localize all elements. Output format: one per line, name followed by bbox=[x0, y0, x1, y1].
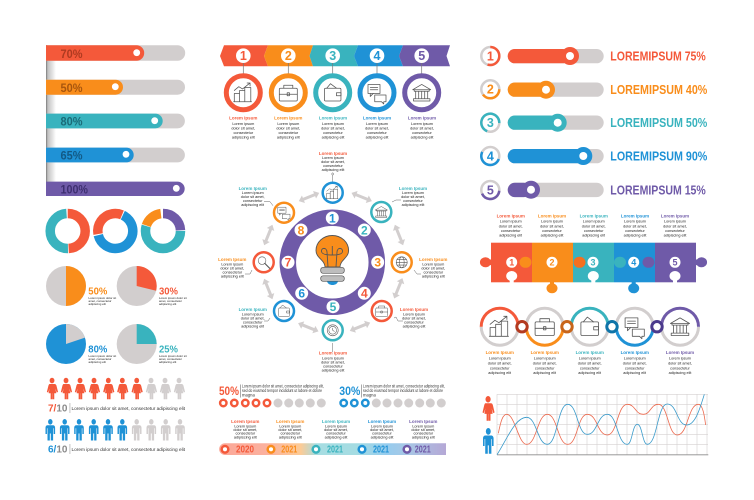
linked circle labels: dolor sit amet, bbox=[578, 362, 602, 366]
linked circle labels: dolor sit amet, bbox=[623, 362, 647, 366]
slider 4 bbox=[479, 144, 707, 168]
puzzle labels: dolor sit amet, bbox=[582, 224, 606, 228]
pie chart 25%: amet, consectetur bbox=[159, 357, 182, 361]
timeline markers and years: 2021 bbox=[373, 444, 389, 456]
node 4: adipiscing elit bbox=[403, 324, 426, 328]
stat: 50% with dots: sed do eiusmod tempor incididunt ut labore et dolore bbox=[242, 388, 323, 393]
linked circle labels: consectetur bbox=[535, 366, 555, 370]
timeline labels: adipiscing elit bbox=[325, 436, 348, 440]
node 4 bbox=[372, 301, 428, 328]
puzzle labels: dolor sit amet, bbox=[623, 224, 647, 228]
step 5: consectetur bbox=[412, 131, 433, 135]
node 7 bbox=[218, 252, 274, 278]
linked circle labels: Lorem Ipsum bbox=[666, 350, 694, 355]
step 4: Lorem ipsum bbox=[366, 122, 388, 126]
pie chart 50%: 50% bbox=[88, 286, 107, 298]
stat: 30% with dots: Lorem ipsum dolor sit amet, consectetur adipiscing elit, bbox=[363, 384, 445, 388]
step 5: adipiscing elit bbox=[411, 136, 434, 140]
node 8: consectetur bbox=[243, 199, 263, 203]
cycle arrows bbox=[260, 189, 407, 335]
node 3: adipiscing elit bbox=[422, 274, 446, 278]
pie chart 25% bbox=[117, 324, 187, 364]
linked circle labels: consectetur bbox=[625, 366, 645, 370]
timeline labels: dolor sit amet, bbox=[278, 428, 302, 432]
puzzle labels: Lorem Ipsum bbox=[497, 214, 525, 218]
node 5: adipiscing elit bbox=[322, 368, 345, 372]
step 5: 5 bbox=[418, 49, 425, 63]
red series bbox=[498, 404, 706, 444]
link 5 bbox=[662, 308, 698, 345]
node 3: dolor sit amet, bbox=[421, 266, 445, 270]
pictogram: 7 of 10 women: 7/10 bbox=[48, 404, 68, 414]
pie chart 80% bbox=[46, 324, 116, 364]
puzzle numbers: 3 bbox=[590, 258, 596, 268]
linked circle labels: adipiscing elit bbox=[488, 371, 512, 375]
step 1: 1 bbox=[240, 49, 247, 63]
donut 3 bbox=[146, 214, 180, 248]
linked circle labels: dolor sit amet, bbox=[488, 362, 512, 366]
timeline markers and years: 2020 bbox=[236, 444, 254, 456]
pie chart 30%: amet, consectetur bbox=[159, 299, 182, 303]
link 2 bbox=[526, 308, 563, 345]
linked circle labels: Lorem ipsum bbox=[579, 356, 601, 360]
slider 1 bbox=[481, 47, 706, 65]
timeline labels bbox=[231, 419, 437, 440]
puzzle labels bbox=[497, 214, 689, 238]
ring numbers: 4 bbox=[361, 287, 368, 301]
step 3: Lorem Ipsum bbox=[319, 116, 347, 120]
timeline labels: Lorem ipsum bbox=[234, 424, 256, 428]
linked circle labels: consectetur bbox=[490, 366, 510, 370]
step 2 bbox=[271, 48, 305, 140]
node 2: Lorem ipsum bbox=[402, 191, 424, 195]
slider 5: 5 bbox=[487, 183, 494, 197]
donut 2 bbox=[95, 211, 136, 251]
puzzle labels: Lorem Ipsum bbox=[580, 214, 608, 218]
node 4: Lorem ipsum bbox=[403, 312, 425, 316]
purple ring bbox=[288, 218, 377, 307]
node 5: dolor sit amet, bbox=[321, 360, 345, 364]
puzzle labels: Lorem ipsum bbox=[664, 220, 686, 224]
linked circle labels: dolor sit amet, bbox=[668, 362, 692, 366]
ring numbers: 3 bbox=[374, 256, 381, 270]
timeline labels: dolor sit amet, bbox=[233, 428, 257, 432]
linked circle labels: Lorem Ipsum bbox=[531, 350, 559, 355]
pictogram: 7 of 10 women bbox=[47, 378, 186, 414]
step 2: Lorem Ipsum bbox=[274, 116, 302, 120]
step 3 bbox=[316, 48, 350, 140]
node 2: Lorem Ipsum bbox=[399, 186, 427, 191]
puzzle labels: adipiscing elit bbox=[624, 234, 647, 238]
puzzle labels: adipiscing elit bbox=[541, 234, 564, 238]
step 5: Lorem ipsum bbox=[411, 122, 433, 126]
timeline labels: adipiscing elit bbox=[234, 436, 258, 440]
link 3 bbox=[571, 308, 608, 345]
node 2: dolor sit amet, bbox=[401, 195, 425, 199]
node 7: dolor sit amet, bbox=[220, 266, 244, 270]
timeline markers and years: 2021 bbox=[327, 444, 343, 456]
ring numbers: 8 bbox=[298, 223, 305, 237]
node 3: Lorem Ipsum bbox=[419, 257, 447, 262]
step 5 bbox=[405, 48, 439, 140]
step 4: dolor sit amet, bbox=[365, 126, 389, 130]
linked circle labels: dolor sit amet, bbox=[533, 362, 557, 366]
slider 4: LOREMIPSUM 90% bbox=[610, 150, 707, 164]
timeline labels: adipiscing elit bbox=[279, 436, 303, 440]
timeline markers and years bbox=[222, 444, 431, 456]
linked circle labels: Lorem ipsum bbox=[534, 356, 556, 360]
node 6 bbox=[239, 301, 294, 328]
stat: 30% with dots bbox=[339, 384, 446, 408]
stat: 30% with dots: magna bbox=[363, 392, 376, 398]
icon: woman bbox=[483, 396, 495, 421]
puzzle numbers: 5 bbox=[672, 258, 678, 268]
puzzle numbers: 1 bbox=[509, 258, 514, 268]
pictogram: 7 of 10 women: Lorem ipsum dolor sit amet, consectetur adipiscing elit bbox=[72, 406, 186, 411]
puzzle labels: Lorem ipsum bbox=[500, 220, 522, 224]
timeline labels: Lorem Ipsum bbox=[231, 419, 259, 424]
step 5: dolor sit amet, bbox=[410, 126, 434, 130]
node 6: consectetur bbox=[243, 320, 263, 324]
node 1: adipiscing elit bbox=[322, 168, 345, 172]
slider 1: 1 bbox=[487, 49, 494, 63]
node 4: Lorem Ipsum bbox=[400, 307, 428, 312]
blue series bbox=[497, 394, 704, 455]
linked circle labels: consectetur bbox=[670, 366, 691, 370]
ring numbers: 2 bbox=[361, 223, 368, 237]
timeline labels: consectetur bbox=[372, 432, 393, 436]
node 1: dolor sit amet, bbox=[321, 160, 345, 164]
node 6: dolor sit amet, bbox=[241, 316, 265, 320]
chart baseline bbox=[497, 454, 708, 455]
bar: 100% bbox=[46, 182, 185, 196]
step 4: consectetur bbox=[367, 131, 388, 135]
bar: 80% bbox=[46, 114, 185, 128]
node 5: Lorem ipsum bbox=[322, 356, 344, 360]
step 3: 3 bbox=[329, 49, 336, 63]
timeline labels: Lorem ipsum bbox=[371, 424, 393, 428]
node 4: dolor sit amet, bbox=[402, 316, 426, 320]
slider 5: LOREMIPSUM 15% bbox=[610, 184, 706, 198]
puzzle labels: Lorem Ipsum bbox=[661, 214, 689, 218]
chart grid bbox=[497, 394, 708, 455]
step 1: adipiscing elit bbox=[232, 136, 256, 140]
timeline labels: adipiscing elit bbox=[412, 436, 436, 440]
node 4: consectetur bbox=[404, 320, 425, 324]
pie chart 30%: adipiscing elit bbox=[159, 302, 177, 306]
timeline labels: consectetur bbox=[235, 432, 256, 436]
bar: 70% bbox=[46, 45, 185, 61]
linked circle labels: consectetur bbox=[580, 366, 600, 370]
node 7: consectetur bbox=[222, 270, 243, 274]
ring numbers bbox=[282, 211, 384, 314]
puzzle labels: consectetur bbox=[584, 229, 604, 233]
bar: 50% bbox=[46, 80, 185, 95]
pie chart 30% bbox=[117, 266, 187, 306]
bar: 50%: 50% bbox=[60, 81, 83, 95]
node 5 bbox=[319, 320, 347, 372]
connector rings bbox=[517, 322, 662, 332]
pie chart 80%: amet, consectetur bbox=[88, 357, 112, 361]
puzzle labels: Lorem Ipsum bbox=[621, 214, 649, 218]
donut 1 bbox=[50, 214, 85, 248]
node 2 bbox=[371, 186, 427, 222]
pie chart 50%: amet, consectetur bbox=[88, 299, 112, 303]
bar: 65% bbox=[46, 148, 185, 162]
ring numbers: 7 bbox=[285, 256, 292, 270]
node 7: Lorem ipsum bbox=[221, 262, 243, 266]
icon: man bbox=[483, 428, 494, 454]
timeline labels: consectetur bbox=[326, 432, 347, 436]
pie chart 50%: adipiscing elit bbox=[88, 302, 106, 306]
puzzle numbers bbox=[506, 257, 680, 268]
puzzle labels: consectetur bbox=[665, 229, 686, 233]
slider 2: LOREMIPSUM 40% bbox=[610, 83, 707, 97]
timeline labels: Lorem ipsum bbox=[279, 424, 301, 428]
node 2: adipiscing elit bbox=[402, 203, 425, 207]
stat: 30% with dots: 30% bbox=[339, 384, 361, 398]
node 1: Lorem ipsum bbox=[322, 156, 344, 160]
pie chart 80%: adipiscing elit bbox=[88, 360, 106, 364]
ring numbers: 6 bbox=[298, 287, 305, 301]
puzzle labels: adipiscing elit bbox=[582, 234, 606, 238]
pie chart 50%: Lorem ipsum dolor sit bbox=[88, 296, 116, 300]
step 4: Lorem Ipsum bbox=[363, 116, 391, 120]
bar: 70%: 70% bbox=[60, 47, 83, 61]
stat: 30% with dots: sed do eiusmod tempor incididunt ut labore et dolore bbox=[363, 388, 444, 393]
line chart bbox=[497, 394, 708, 455]
ring numbers: 5 bbox=[330, 300, 337, 314]
node 1: consectetur bbox=[323, 164, 344, 168]
node 2: consectetur bbox=[403, 199, 424, 203]
pie chart 25%: Lorem ipsum dolor sit bbox=[159, 354, 187, 358]
panel: top ribbon with numbered steps bbox=[220, 45, 450, 140]
puzzle labels: consectetur bbox=[501, 229, 521, 233]
puzzle labels: Lorem Ipsum bbox=[538, 214, 566, 218]
step 4: adipiscing elit bbox=[366, 136, 389, 140]
step 1: consectetur bbox=[233, 131, 254, 135]
bar: 65%: 65% bbox=[60, 148, 83, 162]
step connectors bbox=[243, 62, 422, 75]
node 5: consectetur bbox=[323, 364, 344, 368]
slider 3 bbox=[479, 111, 707, 134]
timeline labels: Lorem ipsum bbox=[412, 424, 434, 428]
linked circle labels: adipiscing elit bbox=[578, 371, 602, 375]
node 1 bbox=[319, 151, 347, 203]
stat: 50% with dots bbox=[219, 384, 326, 408]
node 3 bbox=[392, 252, 447, 278]
linked circle labels: adipiscing elit bbox=[533, 371, 557, 375]
timeline markers and years: 2021 bbox=[415, 444, 431, 456]
node 8 bbox=[239, 186, 294, 223]
donut charts bbox=[50, 211, 180, 251]
pie chart 30%: 30% bbox=[159, 286, 178, 298]
timeline bar bbox=[219, 443, 446, 455]
pie chart 50% bbox=[46, 266, 116, 306]
puzzle labels: adipiscing elit bbox=[499, 234, 523, 238]
puzzle pieces bbox=[480, 243, 707, 293]
puzzle labels: Lorem ipsum bbox=[541, 220, 563, 224]
slider 2: 2 bbox=[487, 83, 494, 97]
slider 3: LOREMIPSUM 50% bbox=[610, 116, 707, 130]
linked circle labels: Lorem Ipsum bbox=[486, 350, 514, 355]
panel: numbered sliders bbox=[479, 47, 707, 200]
linked circle labels: Lorem ipsum bbox=[624, 356, 646, 360]
puzzle labels: consectetur bbox=[542, 229, 563, 233]
step 3: consectetur bbox=[323, 131, 344, 135]
step 3: dolor sit amet, bbox=[321, 126, 345, 130]
puzzle numbers: 2 bbox=[549, 258, 555, 268]
pie chart 80%: Lorem ipsum dolor sit bbox=[88, 354, 116, 358]
slider 1: LOREMIPSUM 75% bbox=[610, 50, 706, 64]
node 6: adipiscing elit bbox=[241, 324, 265, 328]
pictogram: 6 of 10 men bbox=[46, 419, 186, 456]
node 1: Lorem Ipsum bbox=[319, 151, 347, 156]
panel: circular lightbulb diagram bbox=[218, 151, 447, 372]
step 4: 4 bbox=[374, 49, 381, 63]
pictogram: 6 of 10 men: Lorem ipsum dolor sit amet, consectetur adipiscing elit bbox=[72, 447, 186, 452]
panel: linked circles bbox=[481, 308, 698, 345]
icon: light bulb bbox=[316, 235, 349, 285]
step 1: dolor sit amet, bbox=[231, 126, 255, 130]
step 2: 2 bbox=[285, 49, 292, 63]
slider 4: 4 bbox=[487, 149, 494, 163]
linked circle labels: Lorem ipsum bbox=[669, 356, 691, 360]
timeline labels: consectetur bbox=[413, 432, 434, 436]
timeline labels: Lorem Ipsum bbox=[276, 419, 304, 424]
link 1 bbox=[481, 308, 518, 345]
node 6: Lorem ipsum bbox=[242, 312, 264, 316]
pictogram: 6 of 10 men: 6/10 bbox=[48, 444, 68, 456]
node 3: consectetur bbox=[423, 270, 444, 274]
puzzle labels: Lorem ipsum bbox=[624, 220, 646, 224]
timeline labels: dolor sit amet, bbox=[370, 428, 394, 432]
node 3: Lorem ipsum bbox=[422, 262, 444, 266]
step 1: Lorem ipsum bbox=[232, 122, 254, 126]
step 2: consectetur bbox=[278, 131, 299, 135]
step 2: Lorem ipsum bbox=[277, 122, 299, 126]
ribbon arrow bbox=[220, 45, 450, 66]
timeline labels: Lorem ipsum bbox=[325, 424, 347, 428]
step 4 bbox=[360, 48, 394, 140]
puzzle labels: dolor sit amet, bbox=[663, 224, 687, 228]
timeline labels: dolor sit amet, bbox=[324, 428, 348, 432]
puzzle labels: dolor sit amet, bbox=[540, 224, 564, 228]
bar: 100%: 100% bbox=[60, 182, 88, 196]
timeline labels: Lorem Ipsum bbox=[409, 419, 437, 424]
stat: 50% with dots: Lorem ipsum dolor sit amet, consectetur adipiscing elit, bbox=[242, 384, 324, 388]
node 8: Lorem Ipsum bbox=[239, 186, 267, 191]
step 1 bbox=[226, 48, 260, 140]
panel: timeline bbox=[219, 419, 446, 456]
pie chart 80%: 80% bbox=[88, 344, 107, 356]
slider 2 bbox=[481, 80, 707, 99]
linked circle labels: Lorem Ipsum bbox=[576, 350, 604, 355]
panel: puzzle strip bbox=[480, 214, 707, 293]
linked circle labels: Lorem ipsum bbox=[489, 356, 511, 360]
pie chart 30%: Lorem ipsum dolor sit bbox=[159, 296, 187, 300]
step 2: adipiscing elit bbox=[277, 136, 301, 140]
timeline labels: Lorem Ipsum bbox=[368, 419, 396, 424]
ring numbers: 1 bbox=[329, 211, 336, 225]
step 3: adipiscing elit bbox=[322, 136, 345, 140]
puzzle labels: adipiscing elit bbox=[664, 234, 687, 238]
slider 5 bbox=[481, 180, 706, 200]
step 3: Lorem ipsum bbox=[322, 122, 344, 126]
node 8: adipiscing elit bbox=[241, 203, 265, 207]
stat: 50% with dots: 50% bbox=[219, 384, 239, 398]
timeline labels: adipiscing elit bbox=[371, 436, 394, 440]
puzzle labels: Lorem ipsum bbox=[583, 220, 605, 224]
step 1: Lorem Ipsum bbox=[229, 116, 257, 120]
node 7: Lorem Ipsum bbox=[218, 257, 246, 262]
pie chart 25%: 25% bbox=[159, 344, 178, 356]
stat: 50% with dots: magna bbox=[242, 392, 255, 398]
timeline labels: dolor sit amet, bbox=[411, 428, 435, 432]
node 8: dolor sit amet, bbox=[241, 195, 265, 199]
link 4 bbox=[616, 308, 653, 345]
node 5: Lorem Ipsum bbox=[319, 350, 347, 356]
puzzle labels: dolor sit amet, bbox=[499, 224, 523, 228]
timeline labels: Lorem Ipsum bbox=[322, 419, 350, 424]
pie chart 25%: adipiscing elit bbox=[159, 360, 177, 364]
linked circle labels: adipiscing elit bbox=[623, 371, 647, 375]
step 5: Lorem Ipsum bbox=[408, 116, 436, 120]
timeline labels: consectetur bbox=[280, 432, 301, 436]
bar: 80%: 80% bbox=[60, 114, 83, 128]
node 6: Lorem Ipsum bbox=[239, 307, 267, 312]
panel: progress bars with percent tabs bbox=[46, 45, 185, 196]
slider 3: 3 bbox=[487, 116, 494, 130]
node 8: Lorem ipsum bbox=[242, 191, 264, 195]
puzzle labels: consectetur bbox=[625, 229, 646, 233]
node 7: adipiscing elit bbox=[221, 274, 245, 278]
timeline markers and years: 2021 bbox=[281, 444, 297, 456]
puzzle numbers: 4 bbox=[631, 258, 636, 268]
linked circle labels: adipiscing elit bbox=[669, 371, 692, 375]
linked circle labels bbox=[486, 350, 694, 375]
step 2: dolor sit amet, bbox=[276, 126, 300, 130]
linked circle labels: Lorem Ipsum bbox=[621, 350, 649, 355]
